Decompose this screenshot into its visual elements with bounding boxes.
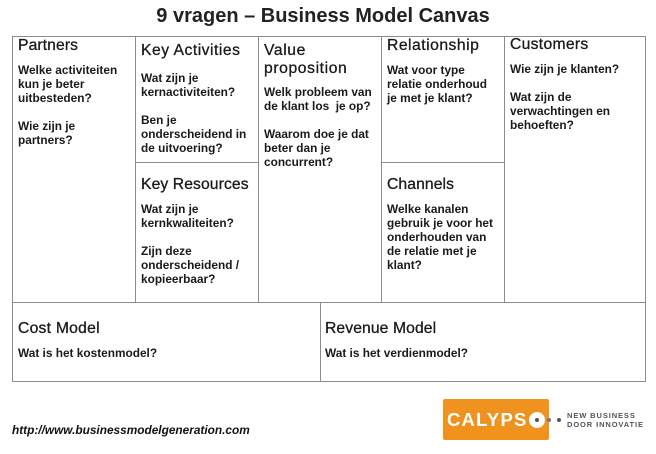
panel: value proposition: concurrent? [264,155,333,169]
panel: relationship: je met je klant? [387,91,473,105]
panel: value proposition: beter dan je [264,141,330,155]
logo wordmark: CALYPS [447,409,528,430]
logo badge [443,399,549,440]
panel: partners: Welke activiteiten [18,63,117,77]
panel: key resources: Key Resources [141,176,249,193]
panel: partners: Wie zijn je [18,119,75,133]
panel: relationship: relatie onderhoud [387,77,487,91]
panel: cost model [18,320,157,360]
panel: channels: gebruik je voor het [387,216,493,230]
logo tagline: NEW BUSINESS [567,411,636,420]
panel: customers: Wat zijn de [510,90,571,104]
panel: key resources: Zijn deze [141,244,192,258]
panel: channels [387,176,493,272]
panel: value proposition [264,42,372,169]
panel: key activities: kernactiviteiten? [141,85,235,99]
canvas grid [12,36,646,382]
panel: customers: behoeften? [510,118,574,132]
panel: key resources: kernkwaliteiten? [141,216,234,230]
panel: relationship: Relationship [387,37,479,54]
panel: relationship: Wat voor type [387,63,465,77]
panel: key activities: Key Activities [141,42,240,59]
panel: channels: klant? [387,258,422,272]
panel: customers: verwachtingen en [510,104,610,118]
logo: calypso [443,399,644,440]
panel: customers: Wie zijn je klanten? [510,62,619,76]
panel: key activities: Ben je [141,113,177,127]
panel: partners: Partners [18,37,78,54]
logo dots [535,418,561,422]
panel: value proposition: Value [264,42,306,59]
logo circle [529,412,545,428]
title: 9 vragen – Business Model Canvas [156,5,490,27]
panel: revenue model: Wat is het verdienmodel? [325,346,468,360]
panel: partners: partners? [18,133,73,147]
panel: customers [510,36,619,132]
panel: key resources: Wat zijn je [141,202,198,216]
panel: channels: Welke kanalen [387,202,468,216]
panel: customers: Customers [510,36,589,53]
panel: revenue model [325,320,468,360]
panel: cost model: Wat is het kostenmodel? [18,346,157,360]
logo tagline [567,411,644,429]
panel: key activities [141,42,246,155]
panel: channels: de relatie met je [387,244,477,258]
panel: value proposition: de klant los je op? [264,99,371,113]
panel: key resources: kopieerbaar? [141,272,215,286]
panel: partners: kun je beter [18,77,84,91]
panel: value proposition: Waarom doe je dat [264,127,369,141]
panel: cost model: Cost Model [18,320,100,337]
panel: value proposition: proposition [264,60,347,77]
panel: key activities: de uitvoering? [141,141,223,155]
panel: channels: onderhouden van [387,230,486,244]
panel: key activities: onderscheidend in [141,127,246,141]
panel: key resources [141,176,249,286]
panel: relationship [386,37,487,105]
panel: value proposition: Welk probleem van [264,85,372,99]
source url: http://www.businessmodelgeneration.com [12,423,250,437]
panel: key activities: Wat zijn je [141,71,198,85]
panel: revenue model: Revenue Model [325,320,436,337]
logo tagline: DOOR INNOVATIE [567,420,644,429]
panel: channels: Channels [387,176,454,193]
panel: key resources: onderscheidend / [141,258,239,272]
panel: partners: uitbesteden? [18,91,92,105]
panel: partners [18,37,117,147]
